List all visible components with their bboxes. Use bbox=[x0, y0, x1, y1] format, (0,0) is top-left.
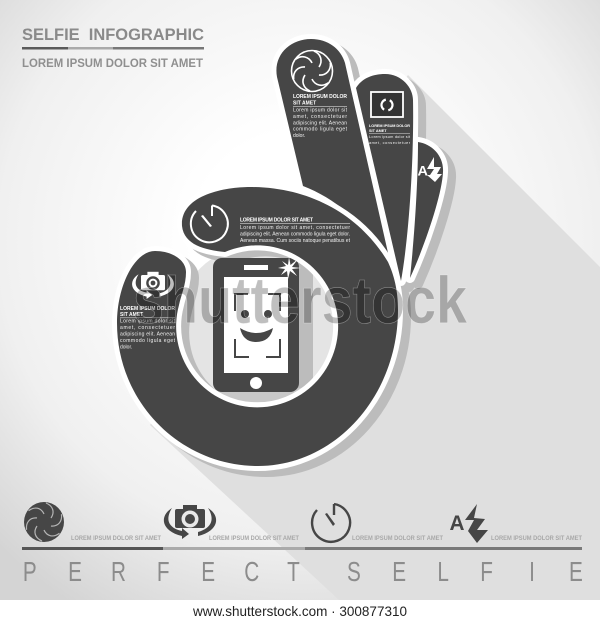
heading: perfect selfie: PERFECT SELFIE bbox=[23, 557, 583, 588]
icon: aperture dark bbox=[23, 502, 65, 542]
text: middle finger: LOREM IPSUM DOLOR bbox=[369, 124, 410, 128]
finger: middle bbox=[356, 74, 413, 281]
offset grey shadow of hand bbox=[125, 45, 451, 472]
finger: top bbox=[276, 39, 391, 266]
icon: rotate camera white bbox=[132, 272, 174, 299]
footer captions bbox=[71, 536, 582, 542]
hole backdrop bbox=[176, 245, 338, 407]
hand spiral body bbox=[117, 187, 398, 466]
icon: rotate camera dark bbox=[164, 505, 216, 539]
text: middle finger: SIT AMET bbox=[369, 129, 387, 133]
text: top finger: SIT AMET bbox=[293, 100, 316, 106]
phone drop shadow bbox=[215, 258, 313, 404]
text: index finger bbox=[240, 218, 351, 244]
text: thumb: amet, consectetuer bbox=[120, 325, 175, 331]
footer captions: LOREM IPSUM DOLOR SIT AMET bbox=[209, 536, 299, 542]
text: thumb: SIT AMET bbox=[120, 312, 143, 318]
text: top finger: dolor. bbox=[293, 133, 305, 139]
icon: timer white bbox=[191, 206, 228, 242]
text: thumb bbox=[120, 306, 176, 350]
phone body bbox=[213, 258, 299, 392]
finger: small bbox=[410, 142, 443, 278]
icon: timer dark bbox=[312, 504, 350, 542]
text: top finger: Lorem ipsum dolor sit bbox=[293, 108, 348, 114]
title: SELFIE INFOGRAPHIC bbox=[22, 26, 204, 44]
text: index finger: LOREM IPSUM DOLOR SIT AMET bbox=[240, 218, 313, 224]
text: thumb: Lorem ipsum dolor sit bbox=[120, 318, 176, 324]
footer captions: LOREM IPSUM DOLOR SIT AMET bbox=[491, 536, 582, 542]
home button bbox=[250, 377, 262, 389]
icon: auto flash white: A bbox=[418, 162, 428, 178]
icon: auto flash dark: A bbox=[450, 512, 464, 535]
text: index finger: Aenean massa. Cum sociis natoque penatibus et bbox=[240, 238, 351, 244]
text: index finger: adipiscing elit. Aenean commodo ligula eget dolor. bbox=[240, 232, 350, 238]
text: thumb: adipiscing elit. Aenean bbox=[120, 332, 175, 338]
footer rule bbox=[22, 547, 582, 550]
phone screen bbox=[224, 277, 288, 373]
text: top finger: LOREM IPSUM DOLOR bbox=[293, 94, 347, 100]
bottom strip bbox=[0, 600, 600, 620]
text: top finger bbox=[293, 94, 348, 139]
text: middle finger: amet, consectetuer bbox=[369, 141, 411, 145]
title block bbox=[22, 26, 204, 70]
text: thumb: dolor. bbox=[120, 344, 132, 350]
text: top finger: adipiscing elit. Aenean bbox=[293, 120, 347, 126]
text: top finger: amet, consectetuer bbox=[293, 114, 347, 120]
text: top finger: commodo ligula eget bbox=[293, 126, 348, 132]
phone speaker bbox=[244, 265, 268, 270]
footer captions: LOREM IPSUM DOLOR SIT AMET bbox=[71, 536, 161, 542]
icon: aperture white bbox=[290, 50, 334, 92]
flash sparkle bbox=[278, 257, 301, 279]
smiling face with focus brackets bbox=[235, 294, 280, 357]
text: index finger: Lorem ipsum dolor sit amet, consectetuer bbox=[240, 225, 350, 231]
text: thumb: LOREM IPSUM DOLOR bbox=[120, 306, 175, 312]
icon: auto flash white bbox=[418, 157, 442, 182]
text: middle finger bbox=[369, 124, 411, 145]
text: middle finger: Lorem ipsum dolor sit bbox=[369, 135, 411, 139]
text: thumb: commodo ligula eget bbox=[120, 338, 176, 344]
source line: www.shutterstock.com · 300877310 bbox=[192, 603, 407, 619]
long diagonal shadow bbox=[150, 75, 600, 600]
icon: auto flash dark bbox=[450, 504, 488, 543]
icon: viewfinder bbox=[371, 92, 403, 117]
footer captions: LOREM IPSUM DOLOR SIT AMET bbox=[352, 536, 443, 542]
phone bbox=[213, 257, 301, 392]
subtitle: LOREM IPSUM DOLOR SIT AMET bbox=[22, 58, 203, 70]
watermark: shutterstock bbox=[133, 263, 467, 337]
